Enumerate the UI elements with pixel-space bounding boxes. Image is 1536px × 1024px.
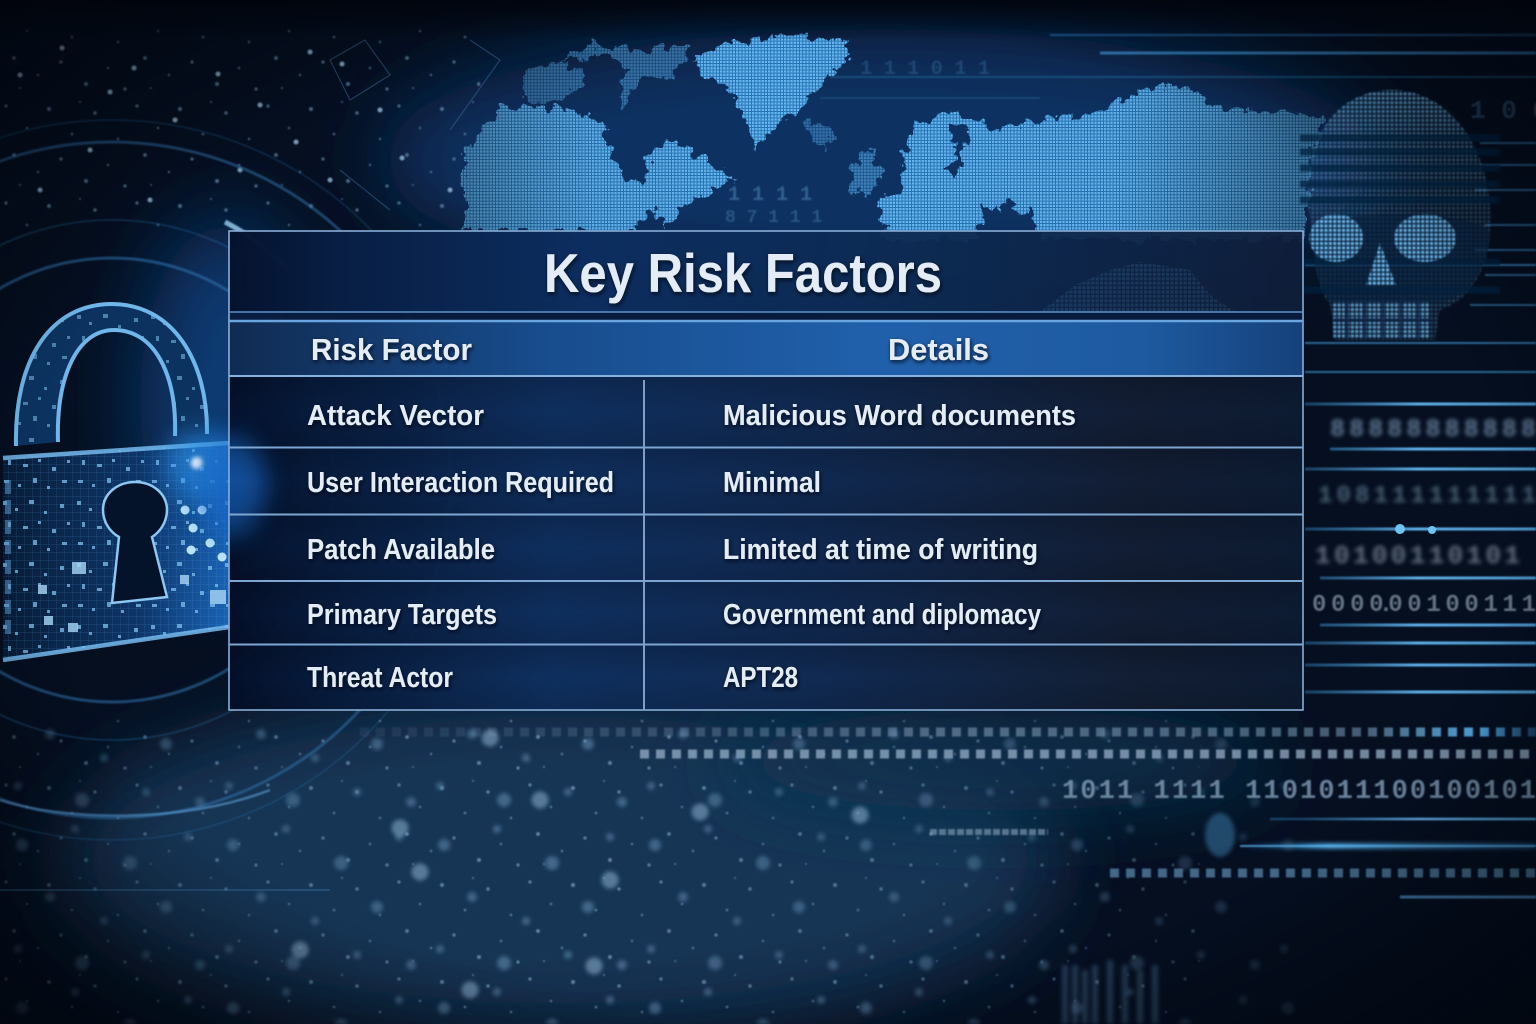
binary digits upper right: 1 1 1 1 [728,184,812,207]
upper left particle field [0,30,500,230]
row: user interaction: User Interaction Required [307,467,614,499]
lock keyhole [103,482,167,603]
row: attack vector [307,400,1076,432]
lock body [3,443,229,660]
row: primary targets: Government and diplomacy [723,599,1041,631]
binary digits upper right: 8 7 1 1 1 [725,208,822,228]
title band [229,231,1303,312]
column headers [311,333,989,367]
icon: padlock [3,304,234,660]
lock shackle [16,304,207,446]
row: patch available: Patch Available [307,534,495,566]
row: threat actor: Threat Actor [307,662,453,694]
right digit rows and lines: 1 0 1 0 0 1 1 0 1 0 1 [1315,541,1520,571]
world map [460,32,1326,246]
row: attack vector: Malicious Word documents [723,400,1076,432]
right digit rows and lines: 8 8 8 8 8 8 8 8 8 8 8 [1330,415,1536,444]
row: threat actor: APT28 [723,662,798,694]
bottom right data rows: 1011 1111 1101011100100101 [1062,777,1536,807]
row: user interaction: Minimal [723,467,821,499]
bottom particle field [0,720,1300,1024]
table grid lines [229,231,1303,710]
binary digits upper right: 1 1 1 0 1 1 [860,58,990,81]
row: user interaction [307,467,821,499]
right digit rows and lines [1305,404,1536,692]
right digit rows and lines: 0 0 0 0.0 0 1 0 0 1 1 1 [1312,592,1536,619]
faint map inside title band [1040,262,1235,312]
column headers: Risk Factor [311,333,472,367]
lock glow [166,431,234,499]
upper right data lines [820,35,1536,372]
row: primary targets [307,599,1041,631]
row vertical shading [229,376,1303,710]
header band [229,320,1303,376]
icon: skull [1300,90,1500,340]
row: patch available [307,534,1038,566]
concentric rings [0,120,472,840]
row: primary targets: Primary Targets [307,599,497,631]
column headers: Details [888,333,989,367]
row: patch available: Limited at time of writing [723,534,1038,566]
panel gap strip [229,312,1303,320]
row: threat actor [307,662,798,694]
bottom right data rows [360,732,1536,897]
panel: key risk factors table [198,231,1303,710]
table rows background [229,376,1303,710]
lock glow bleeding into panel [198,435,266,535]
title: Key Risk Factors [544,242,942,304]
binary digits upper right [725,58,1536,228]
right digit rows and lines: 1 0 8 1 1 1 1 1 1 1 1 1 [1318,483,1536,510]
row: attack vector: Attack Vector [307,400,484,432]
